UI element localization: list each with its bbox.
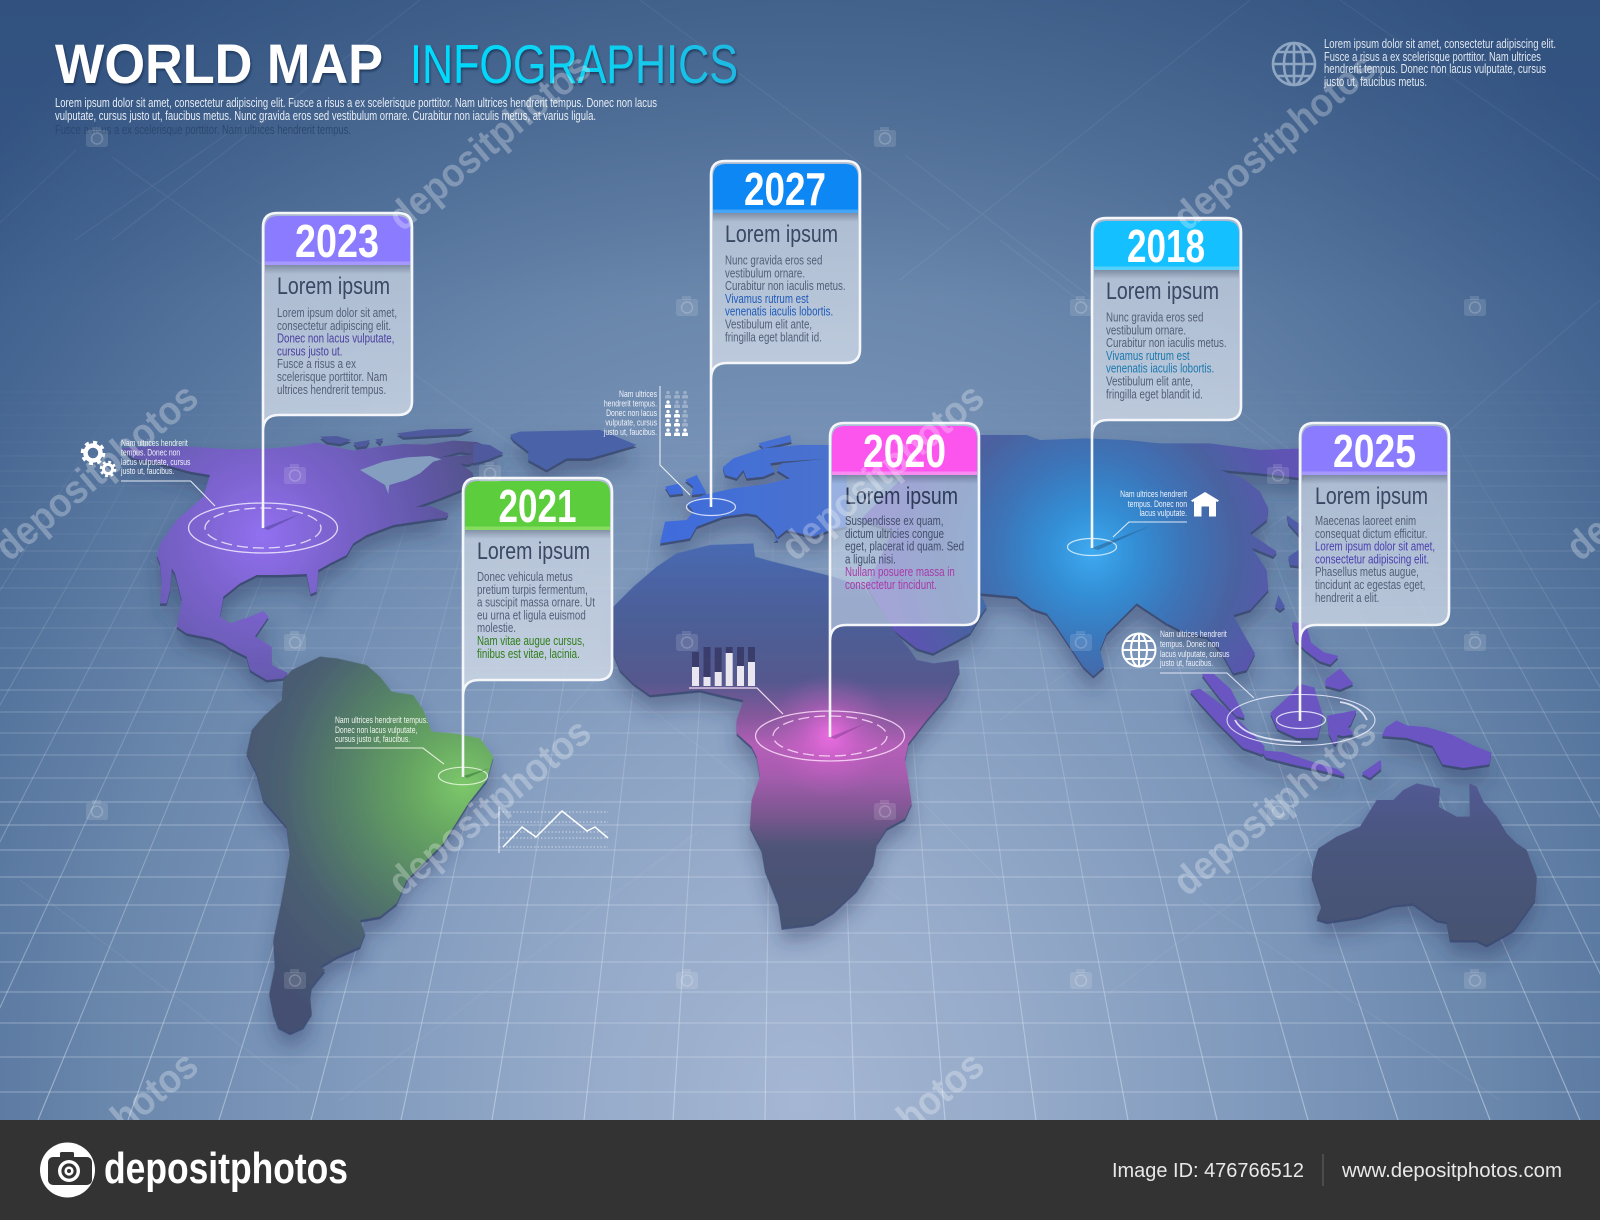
continent: South America — [247, 657, 493, 1033]
card: 2027: Curabitur non iaculis metus. — [725, 280, 846, 293]
card: 2018: Nunc gravida eros sed — [1106, 311, 1203, 325]
bar chart — [689, 647, 783, 714]
callout: gears — [82, 438, 215, 506]
intro text — [55, 96, 657, 137]
card: 2018: vestibulum ornare. — [1106, 324, 1186, 338]
card: 2021: molestie. — [477, 622, 516, 636]
callout text: tempus. Donec non — [1128, 499, 1187, 509]
callout text: justo ut, faucibus. — [603, 427, 657, 437]
callout text: lacus vulputate, cursus — [1160, 649, 1229, 659]
marker rings: Europe — [686, 498, 736, 516]
card: 2025: Lorem ipsum — [1315, 483, 1428, 510]
callout text: cursus justo ut, faucibus. — [335, 734, 410, 744]
card: 2027: Vestibulum elit ante, — [725, 318, 812, 332]
card: 2025: consequat dictum efficitur. — [1315, 528, 1427, 541]
callout text — [1120, 489, 1188, 518]
card: 2020 — [830, 423, 979, 737]
watermark text: depositphotos — [1165, 45, 1385, 239]
world map — [121, 429, 1537, 1033]
title: INFOGRAPHICS: INFOGRAPHICS — [410, 33, 738, 95]
title — [55, 32, 738, 95]
continent: Australia — [1312, 783, 1537, 945]
icon: house — [1191, 492, 1219, 516]
card: 2021: Nam vitae augue cursus, — [477, 635, 585, 648]
card: 2027: Nunc gravida eros sed — [725, 254, 822, 268]
card: 2027 — [711, 161, 860, 507]
card: 2025: Phasellus metus augue, — [1315, 566, 1419, 580]
intro text: Fusce a risus a ex scelerisque porttitor. Nam ultrices hendrerit tempus. — [55, 123, 351, 137]
logo: camera mark — [40, 1142, 95, 1198]
card: 2021: eu urna et ligula euismod — [477, 609, 586, 623]
card: 2023: 2023 — [295, 215, 379, 267]
callout text: Donec non lacus — [606, 408, 657, 418]
card: 2021: 2021 — [498, 480, 576, 532]
continent: Asia — [860, 435, 1313, 676]
callout text — [335, 715, 428, 744]
card: 2023: Lorem ipsum — [277, 273, 390, 300]
callout: globe — [1122, 629, 1254, 698]
card: 2020: Suspendisse ex quam, — [845, 515, 943, 528]
card: 2020: a ligula nisi. — [845, 553, 896, 567]
card: 2023: consectetur adipiscing elit. — [277, 320, 391, 333]
card: 2023: Fusce a risus a ex — [277, 358, 356, 372]
logo: wordmark: depositphotos — [104, 1144, 348, 1193]
card: 2025: hendrerit a elit. — [1315, 592, 1379, 605]
card: 2018: fringilla eget blandit id. — [1106, 388, 1203, 402]
card: 2021: finibus est vitae, lacinia. — [477, 648, 580, 661]
callout text: Nam ultrices hendrerit — [1160, 629, 1227, 639]
marker rings: Africa — [756, 711, 904, 761]
continent: North America — [121, 429, 503, 680]
callout text: Donec non lacus vulputate, — [335, 725, 417, 735]
card: 2018: Vestibulum elit ante, — [1106, 375, 1193, 389]
card: 2021: pretium turpis fermentum, — [477, 584, 588, 597]
callout text: hendrerit tempus. — [604, 398, 657, 409]
card: 2025: consectetur adipiscing elit. — [1315, 553, 1429, 567]
callout text: Nam ultrices hendrerit tempus. — [335, 715, 428, 725]
card: 2023: scelerisque porttitor. Nam — [277, 371, 387, 384]
card: 2025 — [1300, 423, 1449, 721]
callout text — [603, 389, 657, 437]
watermark text: depositphotos — [1165, 710, 1385, 904]
callout text: lacus vulputate. — [1140, 508, 1187, 518]
card: 2027: 2027 — [744, 163, 826, 215]
footer bar — [0, 1120, 1600, 1220]
card: 2018: Vivamus rutrum est — [1106, 350, 1190, 363]
marker rings: Asia — [1068, 526, 1150, 556]
callout: South America — [335, 715, 444, 764]
watermark text: depositphotos — [773, 375, 993, 569]
watermark text: depositphotos — [380, 45, 600, 239]
card: 2021: Donec vehicula metus — [477, 571, 573, 584]
watermark text: depositphotos — [380, 710, 600, 904]
card: 2020: dictum ultricies congue — [845, 528, 944, 541]
card: 2021: a suscipit massa ornare. Ut — [477, 597, 596, 610]
line chart — [499, 807, 608, 853]
card: 2025: Maecenas laoreet enim — [1315, 515, 1416, 528]
card: 2018: venenatis iaculis lobortis. — [1106, 363, 1214, 376]
marker rings: Indonesia — [1227, 694, 1375, 746]
card: 2021 — [463, 478, 612, 777]
card: 2023: Lorem ipsum dolor sit amet, — [277, 307, 397, 320]
card: 2020: eget, placerat id quam. Sed — [845, 541, 964, 554]
callout text: tempus. Donec non — [1160, 639, 1220, 649]
card: 2025: tincidunt ac egestas eget, — [1315, 579, 1425, 592]
callout text: Nam ultrices — [619, 389, 657, 399]
icon: top globe — [1273, 43, 1315, 85]
callout text: vulputate, cursus — [605, 417, 657, 428]
card: 2023: cursus justo ut. — [277, 345, 342, 359]
card: 2018 — [1092, 218, 1241, 548]
callout text: Nam ultrices hendrerit — [1120, 489, 1188, 499]
card: 2020: Lorem ipsum — [845, 483, 958, 510]
card: 2027: Lorem ipsum — [725, 221, 838, 248]
callout text: justo ut, faucibus. — [120, 466, 174, 476]
card: 2027: vestibulum ornare. — [725, 267, 805, 281]
callout: people — [603, 386, 690, 495]
card: 2025: 2025 — [1333, 425, 1416, 477]
top right text: justo ut, faucibus metus. — [1323, 75, 1427, 89]
card: 2027: Vivamus rutrum est — [725, 293, 809, 306]
card: 2020: Nullam posuere massa in — [845, 566, 955, 580]
callout: home — [1113, 489, 1219, 537]
watermark camera icons — [86, 127, 1486, 989]
callout text: justo ut, faucibus. — [1159, 658, 1213, 668]
top right text — [1323, 37, 1556, 89]
intro text: vulputate, cursus justo ut, faucibus metus. Nunc gravida eros sed vestibulum ornare. Curabitur non iaculis metus, at varius ligula. — [55, 109, 596, 123]
callout text — [120, 438, 190, 476]
callout text: tempus. Donec non — [121, 447, 181, 458]
card: 2027: fringilla eget blandit id. — [725, 331, 822, 345]
card: 2020: 2020 — [863, 425, 946, 477]
card: 2027: venenatis iaculis lobortis. — [725, 306, 833, 319]
icon: globe — [1122, 634, 1156, 666]
intro text: Lorem ipsum dolor sit amet, consectetur adipiscing elit. Fusce a risus a ex scelerisque porttitor. Nam ultrices hendrerit tempus. Donec non lacus — [55, 96, 657, 110]
callout text: Nam ultrices hendrerit — [121, 438, 188, 448]
continent: Southeast Asia islands — [1192, 623, 1490, 777]
callout text: lacus vulputate, cursus — [121, 457, 190, 467]
card: 2018: Lorem ipsum — [1106, 278, 1219, 305]
image id: Image ID: 476766512 — [1112, 1160, 1304, 1182]
icon: people grid — [665, 391, 688, 436]
website url: www.depositphotos.com — [1341, 1160, 1562, 1182]
continent: Greenland — [473, 430, 637, 470]
card: 2023 — [263, 213, 412, 528]
title: WORLD MAP: WORLD MAP — [55, 32, 383, 95]
callout text — [1159, 629, 1229, 668]
marker rings: South America — [438, 767, 490, 785]
continent: Africa — [613, 543, 959, 927]
marker rings: North America — [188, 503, 338, 553]
card: 2018: Curabitur non iaculis metus. — [1106, 337, 1227, 350]
icon: gears — [82, 442, 115, 476]
card: 2025: Lorem ipsum dolor sit amet, — [1315, 541, 1435, 554]
card: 2023: ultrices hendrerit tempus. — [277, 384, 386, 397]
card: 2023: Donec non lacus vulputate, — [277, 333, 394, 346]
continent: Europe — [660, 435, 847, 543]
card: 2020: consectetur tincidunt. — [845, 579, 937, 592]
card: 2018: 2018 — [1127, 220, 1205, 272]
card: 2021: Lorem ipsum — [477, 538, 590, 565]
